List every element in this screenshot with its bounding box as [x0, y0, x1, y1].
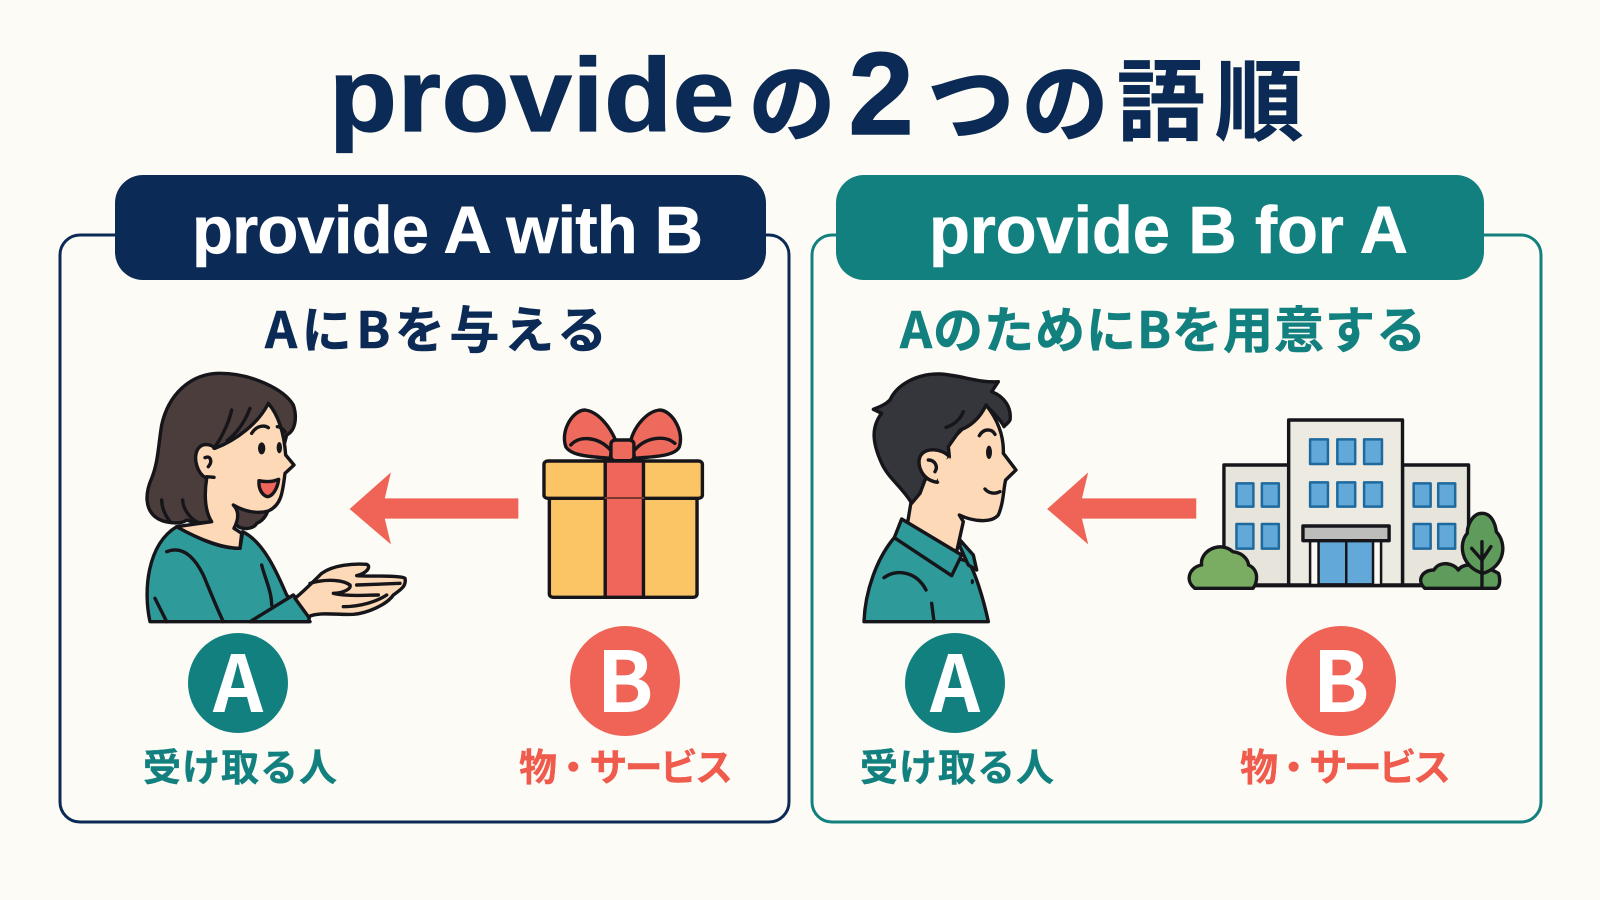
panel header: provide A with B	[192, 193, 703, 268]
title: 2	[848, 28, 914, 159]
panel border	[812, 235, 1541, 822]
badge B	[570, 616, 680, 737]
title: 語	[1117, 32, 1205, 159]
arrow: from B to A	[1047, 472, 1196, 544]
badge B: B	[596, 616, 654, 737]
icon: building with trees	[1189, 420, 1503, 588]
label: thing or service: 物・サービス	[1240, 737, 1451, 792]
title	[329, 28, 1303, 159]
subtitle: AにBを与える	[264, 291, 607, 363]
panel border	[60, 235, 789, 822]
panel header: provide B for A	[929, 193, 1408, 268]
badge B: B	[1312, 616, 1370, 737]
icon: gift box	[544, 410, 702, 597]
panel: provide A with B	[60, 175, 789, 822]
icon: man in profile	[864, 374, 1016, 622]
panel: provide B for A	[812, 175, 1541, 822]
icon: woman receiving with open hand	[147, 373, 405, 622]
arrow: from B to A	[350, 472, 518, 544]
title: つ	[928, 34, 1014, 159]
panel header	[115, 175, 766, 280]
badge A	[188, 623, 288, 735]
badge A: A	[929, 623, 981, 735]
title: の	[1022, 34, 1108, 159]
title: 順	[1215, 32, 1303, 159]
title: の	[749, 34, 835, 159]
label: recipient: 受け取る人	[143, 737, 337, 792]
subtitle: AのためにBを用意する	[899, 291, 1426, 363]
badge A	[905, 623, 1005, 735]
label: recipient: 受け取る人	[860, 737, 1054, 792]
label: thing or service: 物・サービス	[519, 737, 733, 792]
badge A: A	[212, 623, 264, 735]
badge B	[1286, 616, 1396, 737]
panel header	[836, 175, 1484, 280]
title: provide	[329, 37, 735, 153]
